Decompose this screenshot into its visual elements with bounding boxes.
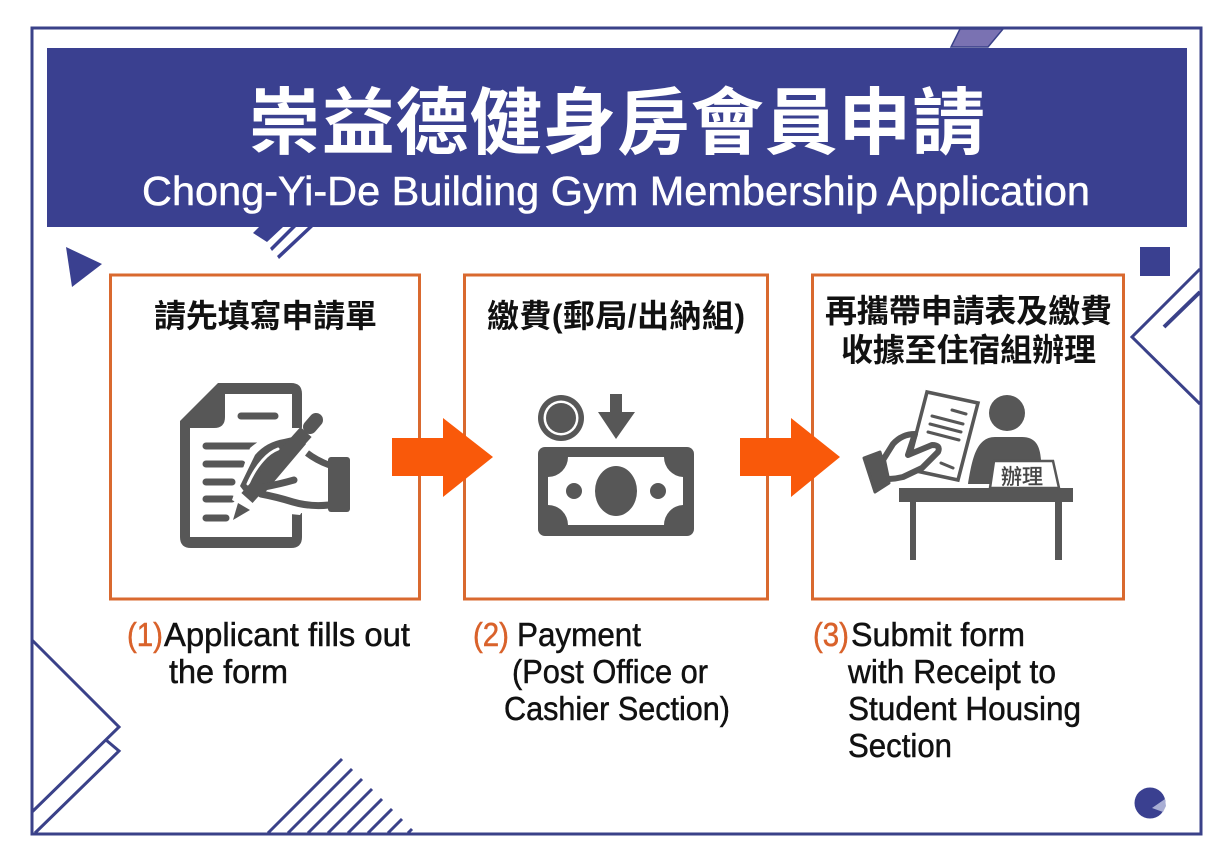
- decoration: pie circle: [1134, 788, 1166, 818]
- icon: handing form at desk: [864, 392, 1073, 560]
- heading: step 3: 再攜帶申請表及繳費: [825, 293, 1112, 329]
- heading: step 2: 繳費(郵局/出納組): [487, 298, 745, 334]
- panel: step 2: [464, 275, 768, 599]
- caption: step 1: (1): [127, 616, 163, 653]
- heading: step 3: 收據至住宿組辦理: [841, 332, 1096, 368]
- heading: step 3: [825, 293, 1112, 368]
- caption: step 3: [813, 616, 1081, 764]
- title: English: Chong-Yi-De Building Gym Membership Application: [142, 168, 1090, 214]
- title banner: [47, 48, 1187, 227]
- icon: handing form at desk: 辦理: [1001, 466, 1043, 489]
- panel: step 3: [812, 275, 1124, 599]
- decoration: hatch lines: [268, 759, 412, 833]
- decoration: top parallelogram: [951, 29, 1003, 47]
- decoration: triangle: [66, 247, 102, 287]
- caption: step 3: with Receipt to: [847, 653, 1056, 690]
- icon: coin and banknote: [538, 394, 694, 536]
- caption: step 1: [127, 616, 410, 690]
- caption: step 1: Applicant fills out: [164, 616, 410, 653]
- caption: step 2: Payment: [517, 616, 641, 653]
- decoration: right chevrons: [1132, 269, 1200, 404]
- panel: step 1: [110, 275, 420, 599]
- caption: step 2: [473, 616, 730, 727]
- arrow: step 2 to step 3: [740, 418, 840, 497]
- decoration: lower left chevrons: [32, 640, 119, 833]
- caption: step 2: (2): [473, 616, 509, 653]
- caption: step 2: Cashier Section): [504, 690, 730, 727]
- decoration: square: [1140, 247, 1170, 276]
- icon: document and pen: [180, 383, 350, 548]
- caption: step 3: Student Housing: [848, 690, 1081, 727]
- decoration: shapes below banner: [253, 227, 313, 259]
- title: Chinese: 崇益德健身房會員申請: [248, 83, 985, 164]
- caption: step 3: Section: [848, 727, 952, 764]
- arrow: step 1 to step 2: [392, 418, 493, 497]
- heading: step 1: 請先填寫申請單: [154, 298, 377, 334]
- caption: step 1: the form: [169, 653, 288, 690]
- caption: step 3: Submit form: [851, 616, 1025, 653]
- caption: step 2: (Post Office or: [512, 653, 708, 690]
- caption: step 3: (3): [813, 616, 849, 653]
